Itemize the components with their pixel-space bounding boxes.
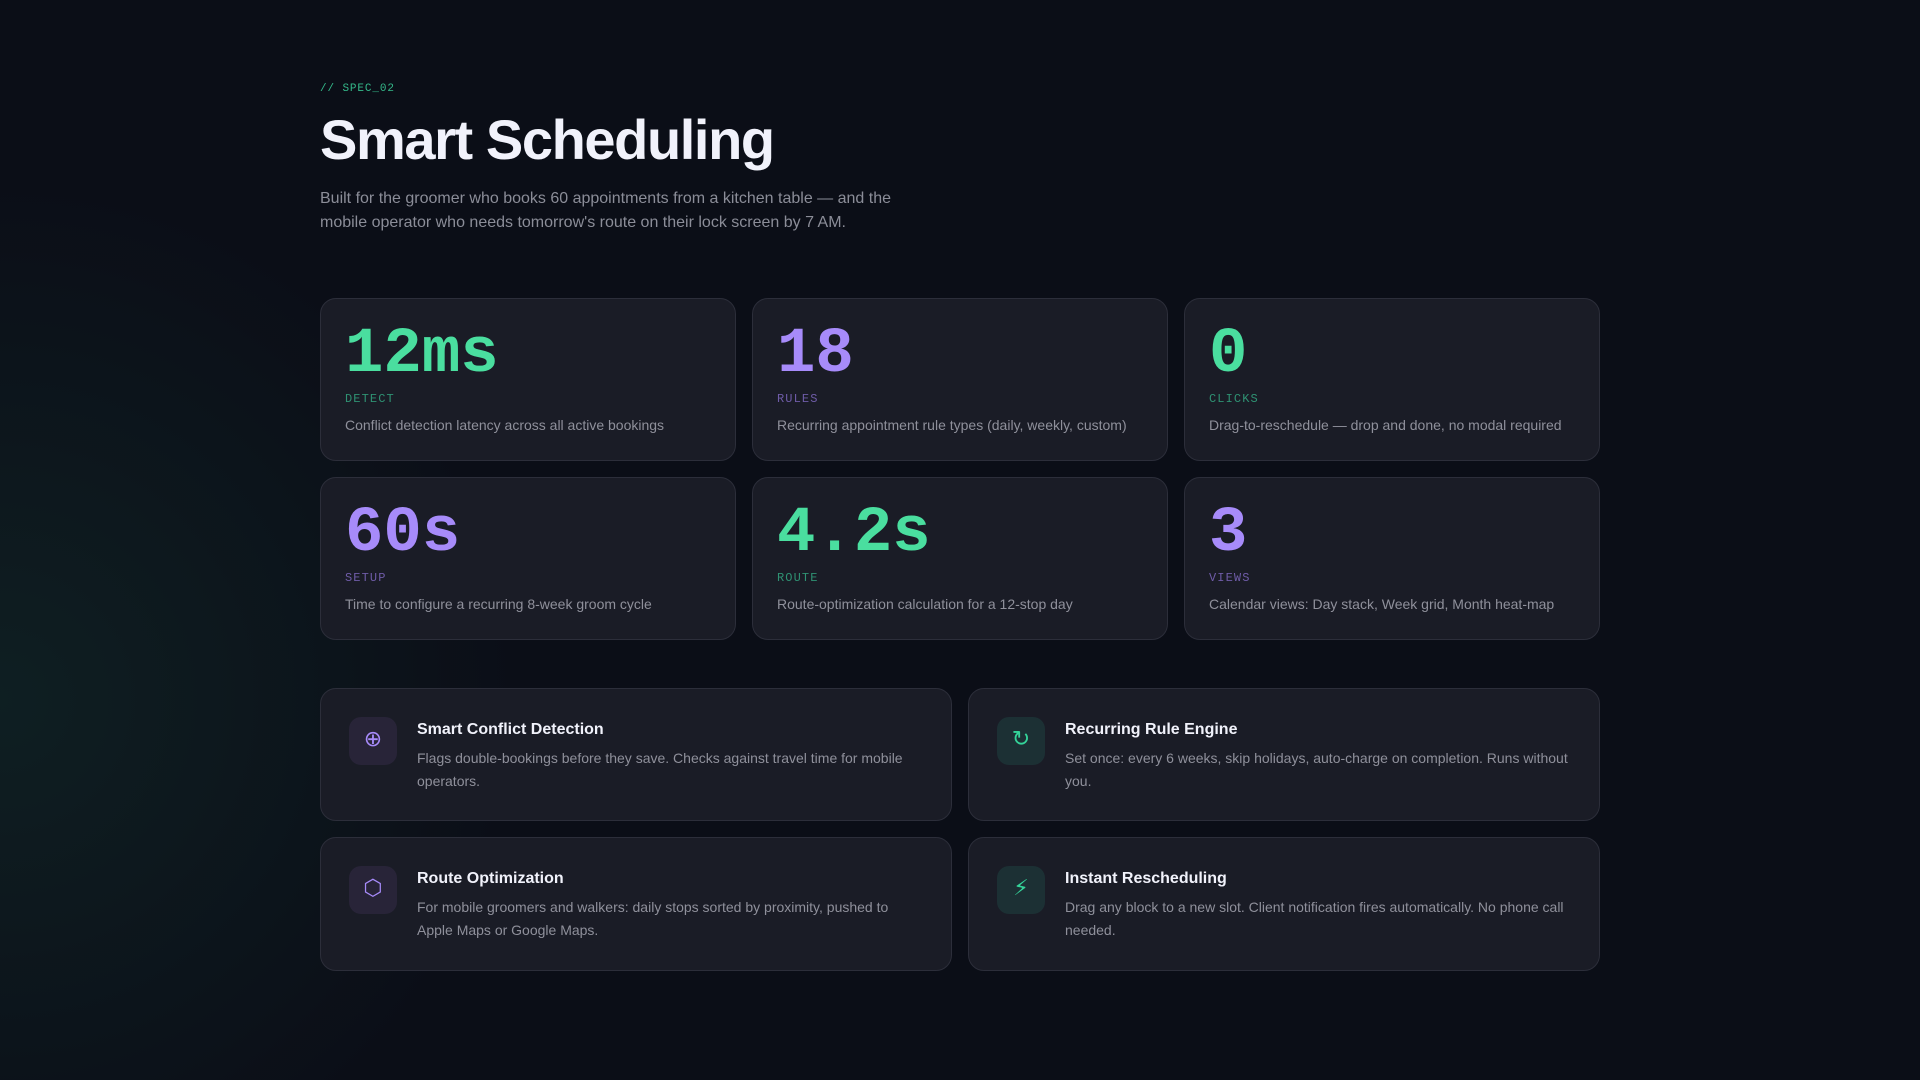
feature card: route optimization: Route Optimization <box>417 870 564 887</box>
feature card: instant rescheduling: Instant Rescheduling <box>1065 870 1227 887</box>
stat card: 18 rules: RULES <box>777 392 819 406</box>
feature card: smart conflict detection <box>320 688 952 821</box>
stat card: 60s setup: SETUP <box>345 571 387 585</box>
feature card: instant rescheduling: ⚡︎ <box>1013 876 1029 901</box>
stat card: 18 rules: 18 <box>777 319 854 391</box>
subtitle: Built for the groomer who books 60 appointments from a kitchen table — and the mobile operator who needs tomorrow's route on their lock screen by 7 AM. <box>320 190 891 231</box>
stat card: 60s setup: 60s <box>345 498 460 570</box>
eyebrow label: // SPEC_02 <box>320 83 395 95</box>
feature card: recurring rule engine: Recurring Rule Engine <box>1065 721 1237 738</box>
feature card: instant rescheduling <box>968 837 1600 971</box>
stat card: 4.2s route: 4.2s <box>777 498 931 570</box>
feature card: smart conflict detection: ⊕ <box>364 727 382 752</box>
feature card: route optimization: ⬡ <box>363 876 383 901</box>
feature card: recurring rule engine <box>968 688 1600 821</box>
feature card: smart conflict detection: Smart Conflict Detection <box>417 721 604 738</box>
stat card: 3 views: Calendar views: Day stack, Week grid, Month heat-map <box>1209 596 1554 612</box>
feature card: recurring rule engine: ↻ <box>1012 727 1030 752</box>
stat card: 12ms detect: Conflict detection latency across all active bookings <box>345 417 664 433</box>
feature card: route optimization: For mobile groomers and walkers: daily stops sorted by proximity, pushed to Apple Maps or Google Maps. <box>417 899 888 938</box>
stat card: 0 clicks: 0 <box>1209 319 1247 391</box>
stat card: 4.2s route: Route-optimization calculation for a 12-stop day <box>777 596 1073 612</box>
stat card: 60s setup <box>320 477 736 640</box>
stat card: 0 clicks <box>1184 298 1600 461</box>
stat card: 18 rules: Recurring appointment rule types (daily, weekly, custom) <box>777 417 1127 433</box>
stat card: 4.2s route <box>752 477 1168 640</box>
stat card: 12ms detect: DETECT <box>345 392 395 406</box>
stat card: 0 clicks: Drag-to-reschedule — drop and done, no modal required <box>1209 417 1562 433</box>
stat card: 3 views: 3 <box>1209 498 1247 570</box>
title: Smart Scheduling <box>320 108 774 171</box>
feature card: recurring rule engine: Set once: every 6 weeks, skip holidays, auto-charge on completion. Runs without you. <box>1065 750 1568 789</box>
stat card: 3 views: VIEWS <box>1209 571 1251 585</box>
stat card: 0 clicks: CLICKS <box>1209 392 1259 406</box>
stat card: 18 rules <box>752 298 1168 461</box>
stat card: 4.2s route: ROUTE <box>777 571 819 585</box>
feature card: instant rescheduling: Drag any block to a new slot. Client notification fires automatically. No phone call needed. <box>1065 899 1564 938</box>
stat card: 12ms detect <box>320 298 736 461</box>
feature card: route optimization <box>320 837 952 971</box>
stat card: 12ms detect: 12ms <box>345 319 499 391</box>
feature card: smart conflict detection: Flags double-bookings before they save. Checks against travel time for mobile operators. <box>417 750 903 789</box>
stat card: 60s setup: Time to configure a recurring 8-week groom cycle <box>345 596 652 612</box>
stat card: 3 views <box>1184 477 1600 640</box>
